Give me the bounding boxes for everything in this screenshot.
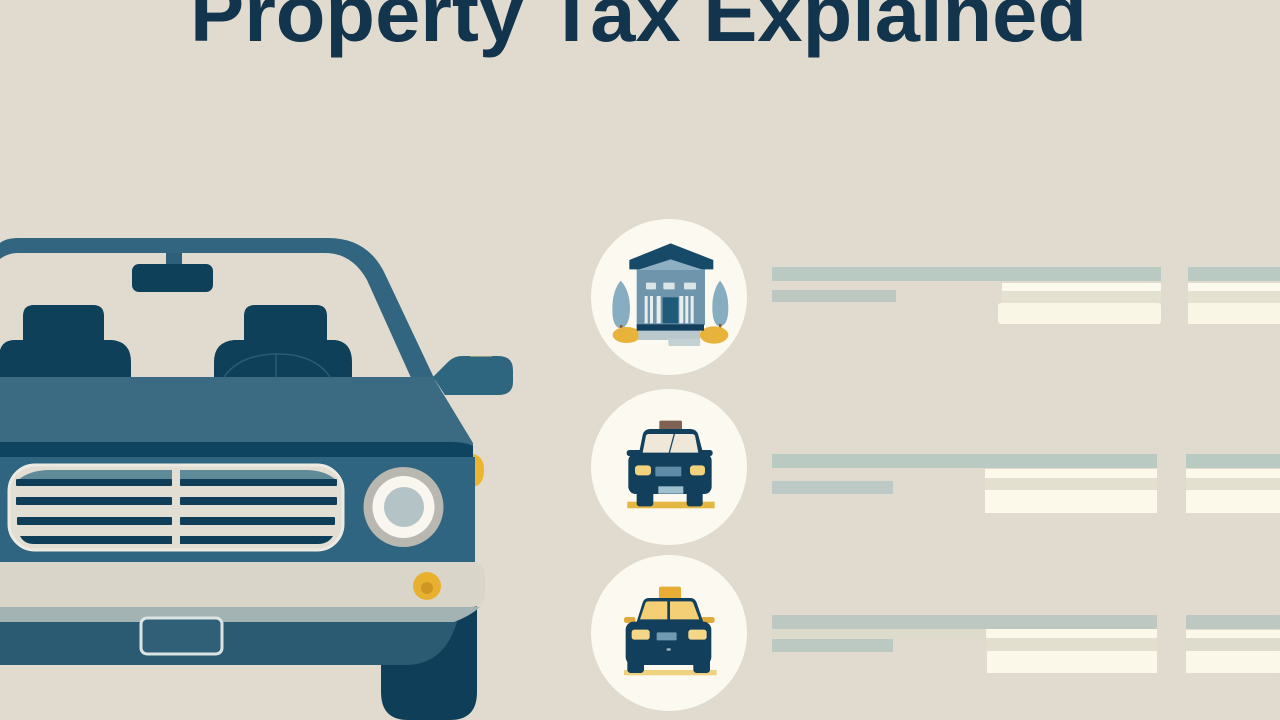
hood shadow strip	[0, 442, 473, 457]
heading bar	[772, 267, 1161, 281]
door	[663, 297, 678, 323]
right column bars	[1186, 615, 1280, 673]
row 2: taxi icon	[591, 389, 747, 545]
icon circle	[591, 389, 747, 545]
body	[626, 622, 711, 665]
row 3: yellow taxi icon	[591, 555, 747, 711]
windshield frame	[0, 238, 435, 380]
hood	[0, 377, 473, 458]
heading bar	[772, 454, 1157, 468]
shrubs	[613, 326, 728, 344]
mirrors	[627, 450, 713, 456]
faint band	[1002, 291, 1161, 303]
cabin	[638, 429, 704, 457]
steps	[638, 330, 700, 346]
wheels	[637, 488, 703, 506]
icon: yellow-window car	[624, 587, 717, 675]
right seat with steering wheel	[214, 305, 352, 378]
front body panel	[0, 457, 475, 562]
icon: dark car	[627, 421, 715, 508]
windshield	[643, 434, 698, 453]
icon: building	[612, 243, 728, 346]
right column bars	[1188, 267, 1280, 324]
faint band	[985, 478, 1157, 490]
windows	[640, 601, 699, 619]
faint band	[772, 629, 986, 638]
wall	[637, 260, 705, 325]
row 1: bars	[772, 267, 1280, 324]
plate	[658, 486, 683, 494]
headlight	[364, 467, 444, 547]
windows	[646, 283, 696, 289]
icon circle	[591, 555, 747, 711]
amber fog light	[413, 572, 441, 600]
base	[637, 324, 704, 331]
ground	[624, 670, 717, 675]
car illustration	[0, 238, 513, 720]
mirrors	[624, 617, 715, 623]
roof	[629, 243, 713, 269]
thin cream bar	[985, 469, 1157, 478]
sub bar	[772, 290, 896, 302]
grille	[9, 465, 343, 550]
emblem	[667, 648, 671, 651]
left seat	[0, 305, 131, 378]
ground	[627, 502, 715, 508]
icon circle	[591, 219, 747, 375]
faint band right	[986, 638, 1157, 651]
grille	[657, 632, 677, 640]
thick cream bar	[998, 303, 1161, 324]
headlights	[632, 630, 707, 640]
grille	[655, 467, 681, 476]
thick cream bar	[987, 651, 1157, 673]
thin cream bar	[986, 629, 1157, 638]
row 1: government building icon	[591, 219, 747, 375]
wheels	[627, 658, 710, 673]
headlights	[635, 465, 705, 475]
heading bar	[772, 615, 1157, 629]
bumper lip	[0, 607, 480, 622]
thick cream bar	[985, 490, 1157, 513]
bumper	[0, 562, 485, 607]
side mirror	[433, 356, 513, 395]
sub bar	[772, 639, 893, 652]
trees	[612, 281, 728, 338]
gable	[637, 259, 705, 270]
sub bar	[772, 481, 893, 494]
cabin	[636, 598, 704, 624]
rear wheel	[381, 600, 477, 720]
right column bars	[1186, 454, 1280, 513]
windshield divider	[669, 434, 674, 453]
body	[628, 453, 712, 494]
rear-view mirror	[132, 253, 213, 292]
roof sign	[659, 421, 682, 430]
columns	[645, 296, 694, 323]
row 3: bars	[772, 615, 1280, 673]
roof sign	[659, 587, 681, 599]
row 2: bars	[772, 454, 1280, 513]
thin cream bar	[1002, 283, 1161, 291]
lower body	[0, 618, 458, 665]
amber side marker	[473, 454, 484, 487]
license plate	[141, 618, 222, 654]
